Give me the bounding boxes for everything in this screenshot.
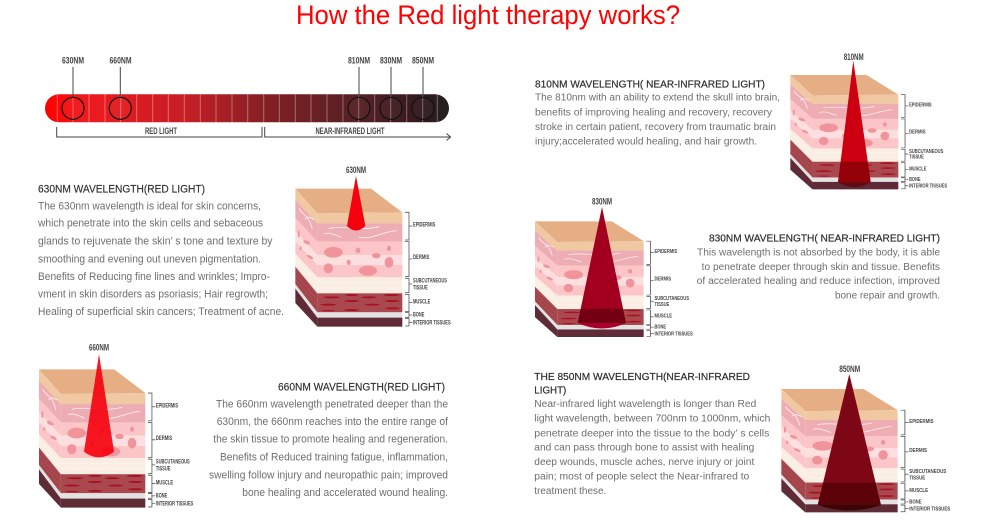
layer labels: EPIDERMIS xyxy=(156,402,178,409)
skin cube xyxy=(781,389,909,512)
layer labels xyxy=(909,418,950,512)
text block: 630nm: Healing of superficial skin cancers; Treatment of acne. xyxy=(38,306,284,318)
text block: 660nm: The 660nm wavelength penetrated deeper than the xyxy=(216,398,448,410)
layer labels: INTERIOR TISSUES xyxy=(413,320,451,327)
text block: 660nm: swelling follow injury and neuropathic pain; improved xyxy=(209,469,448,481)
text block: 660nm: Benefits of Reduced training fatigue, inflammation, xyxy=(220,451,448,463)
skin cube xyxy=(535,221,654,337)
layer labels: MUSCLE xyxy=(413,299,430,306)
wavelength labels: 810NM xyxy=(348,56,370,66)
text block: 850nm: and can pass through bone to assist with healing xyxy=(534,443,754,454)
layer labels: MUSCLE xyxy=(909,487,928,494)
layer labels: SUBCUTANEOUS xyxy=(909,469,946,475)
layer labels: MUSCLE xyxy=(909,167,927,172)
layer labels: BONE xyxy=(909,499,922,505)
light cone 850nm xyxy=(818,374,881,510)
light cone 660nm xyxy=(84,354,114,457)
light cone 810nm xyxy=(838,61,871,187)
layer labels: BONE xyxy=(156,493,167,500)
range labels: RED LIGHT xyxy=(145,126,177,136)
wavelength markers xyxy=(62,67,434,119)
layer labels: TISSUE xyxy=(909,475,925,481)
wavelength labels: 660NM xyxy=(110,56,132,66)
text block: 660nm: the skin tissue to promote healing and regeneration. xyxy=(213,434,448,446)
layer labels: INTERIOR TISSUES xyxy=(909,506,950,512)
text block: 830nm: This wavelength is not absorbed by the body, it is able xyxy=(697,248,940,259)
layer labels: INTERIOR TISSUES xyxy=(156,501,193,508)
text block: 850nm: light wavelength, between 700nm to 1000nm, which xyxy=(534,414,770,425)
text block: 630nm: smoothing and evening out uneven pigmentation. xyxy=(38,253,261,265)
text block: 830nm: of accelerated healing and reduce infection, improved xyxy=(697,276,940,287)
layer labels: DERMIS xyxy=(909,130,926,135)
layer labels: DERMIS xyxy=(156,435,172,442)
cone label 660nm: 660NM xyxy=(89,342,109,352)
text block: 850nm: pain; most of people select the Near-infrared to xyxy=(534,472,750,483)
range brackets xyxy=(57,127,450,140)
text block: 830nm xyxy=(697,234,940,301)
layer labels: DERMIS xyxy=(909,447,927,454)
wavelength labels: 830NM xyxy=(380,56,402,66)
diagram: 810nm skin layers xyxy=(790,52,947,189)
range labels xyxy=(145,126,385,136)
text block: 630nm: The 630nm wavelength is ideal for skin concerns, xyxy=(38,200,261,212)
diagram: 660nm skin layers xyxy=(39,342,193,508)
cone label 630nm: 630NM xyxy=(346,165,366,175)
text block: 850nm: LIGHT) xyxy=(534,386,566,397)
text block: 660nm: bone healing and accelerated wound healing. xyxy=(242,487,448,499)
layer labels xyxy=(413,222,451,327)
layer labels: SUBCUTANEOUS xyxy=(156,458,190,466)
text block: 630nm xyxy=(37,184,284,318)
layer labels: SUBCUTANEOUS xyxy=(654,297,689,302)
text block: 660nm: 660NM WAVELENGTH(RED LIGHT) xyxy=(278,382,445,394)
layer labels: SUBCUTANEOUS xyxy=(413,278,447,285)
layer labels xyxy=(909,103,947,189)
text block: 810nm: stroke in certain patient, recovery from traumatic brain xyxy=(535,122,776,133)
cone label 850nm: 850NM xyxy=(839,364,860,374)
layer labels: TISSUE xyxy=(654,302,669,308)
text block: 830nm: to penetrate deeper through skin and tissue. Benefits xyxy=(702,262,940,273)
text block: 660nm xyxy=(209,382,449,499)
layer labels: TISSUE xyxy=(156,466,170,473)
text block: 630nm: Benefits of Reducing fine lines and wrinkles; Impro- xyxy=(38,271,270,283)
layer labels: TISSUE xyxy=(413,285,428,292)
layer labels: MUSCLE xyxy=(156,480,173,487)
text block: 810nm: The 810nm with an ability to extend the skull into brain, xyxy=(535,93,780,104)
layer labels: INTERIOR TISSUES xyxy=(654,332,693,337)
layer labels: BONE xyxy=(909,177,921,183)
cone label 810nm: 810NM xyxy=(844,52,864,62)
text block: 850nm: deep wounds, muscle aches, nerve injury or joint xyxy=(534,457,755,468)
text block: 810nm: benefits of improving healing and recovery, recovery xyxy=(535,108,772,119)
wavelength labels: 630NM xyxy=(62,56,84,66)
layer labels: INTERIOR TISSUES xyxy=(909,184,947,189)
text block: 850nm: penetrate deeper into the tissue to the body’ s cells xyxy=(534,428,769,439)
skin cube xyxy=(295,189,412,327)
layer labels xyxy=(654,250,693,337)
text block: 810nm: 810NM WAVELENGTH( NEAR-INFRARED LIGHT) xyxy=(535,79,765,90)
text block: 810nm xyxy=(535,79,780,147)
text block: 660nm: 630nm, the 660nm reaches into the entire range of xyxy=(217,416,449,428)
cone label 830nm: 830NM xyxy=(592,197,612,207)
layer labels: BONE xyxy=(413,312,424,319)
layer labels xyxy=(156,402,193,508)
layer labels: SUBCUTANEOUS xyxy=(909,149,943,155)
spectrum chart: wavelength bar xyxy=(45,56,450,140)
text block: 630nm: vment in skin disorders as psoriasis; Hair regrowth; xyxy=(38,289,268,301)
wavelength labels: 850NM xyxy=(412,56,434,66)
layer labels: EPIDERMIS xyxy=(654,250,677,255)
text block: 630nm: which penetrate into the skin cells and sebaceous xyxy=(37,218,263,230)
layer labels: DERMIS xyxy=(413,254,429,261)
text block: 850nm xyxy=(534,372,770,497)
text block: 630nm: glands to rejuvenate the skin’ s tone and texture by xyxy=(38,235,273,247)
gradient bar xyxy=(45,94,449,122)
layer labels: DERMIS xyxy=(654,277,671,282)
text block: 850nm: THE 850NM WAVELENGTH(NEAR-INFRARED xyxy=(534,372,750,383)
skin cube xyxy=(39,369,155,508)
light cone 630nm xyxy=(347,176,365,230)
layer labels: EPIDERMIS xyxy=(909,418,934,425)
diagram: 630nm skin layers xyxy=(295,165,451,327)
text block: 850nm: Near-infrared light wavelength is longer than Red xyxy=(534,399,756,410)
layer labels: MUSCLE xyxy=(654,314,672,320)
layer labels: EPIDERMIS xyxy=(413,222,435,229)
light cone 830nm xyxy=(578,207,626,328)
text block: 850nm: treatment these. xyxy=(534,486,606,497)
text block: 810nm: injury;accelerated would healing, and hair growth. xyxy=(535,136,757,147)
title: How the Red light therapy works? xyxy=(296,0,680,30)
text block: 830nm: 830NM WAVELENGTH( NEAR-INFRARED LIGHT) xyxy=(709,234,940,245)
range labels: NEAR-INFRARED LIGHT xyxy=(316,126,385,136)
layer labels: EPIDERMIS xyxy=(909,103,932,108)
text block: 630nm: 630NM WAVELENGTH(RED LIGHT) xyxy=(38,184,205,196)
wavelength labels xyxy=(62,56,434,66)
layer labels: BONE xyxy=(654,325,666,330)
skin cube xyxy=(790,75,908,189)
layer labels: TISSUE xyxy=(909,155,924,160)
text block: 830nm: bone repair and growth. xyxy=(835,290,940,301)
diagram: 830nm skin layers xyxy=(535,197,693,337)
diagram: 850nm skin layers xyxy=(781,364,950,512)
